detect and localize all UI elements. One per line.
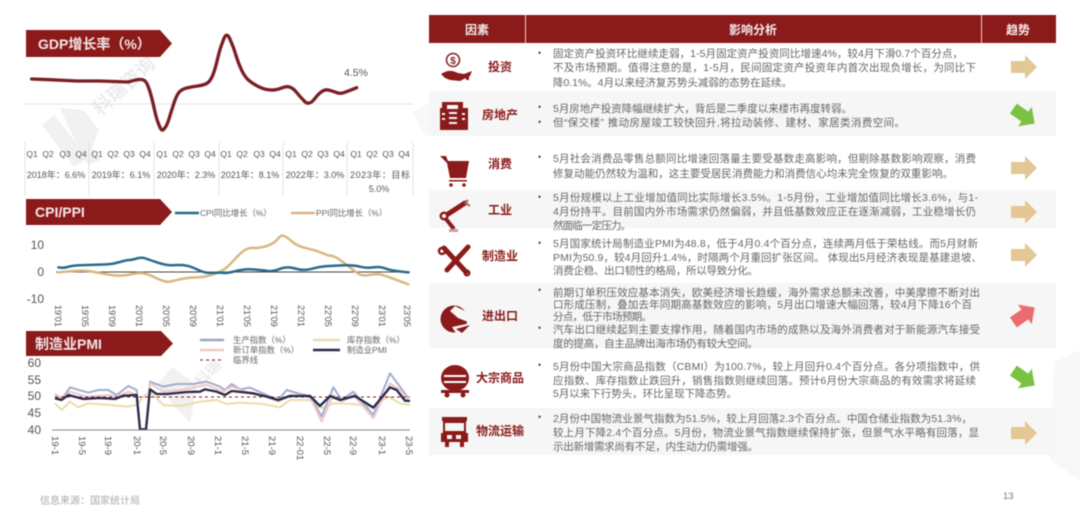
arrow: flat <box>1011 55 1037 79</box>
icon: robot arm <box>440 200 470 232</box>
PMI line chart: 23-1 <box>376 436 387 455</box>
PMI line chart: 21-1 <box>212 436 223 455</box>
row: logistics: 物流运输 <box>476 423 524 438</box>
source note: 信息来源：国家统计局 <box>40 494 140 507</box>
GDP quarter table: Q2 <box>366 149 378 159</box>
row: commodities: 5月以来下行势头，环比呈现下降态势。 <box>553 387 737 400</box>
heading: CPI/PPI: CPI/PPI <box>35 204 85 220</box>
PMI legend: 制造业PMI <box>347 345 387 355</box>
row: manufacturing: 5月国家统计局制造业PMI为48.8，低于4月0.4个百分点，连续两月低于荣枯线。而5月财新 <box>553 237 978 250</box>
CPI/PPI line chart: 23'01 <box>377 305 387 327</box>
arrow: down <box>1006 361 1042 395</box>
table header <box>429 15 1056 43</box>
GDP quarter table: Q1 <box>350 149 362 159</box>
CPI/PPI line chart: 20'05 <box>161 305 171 327</box>
panel: CPI/PPI <box>26 199 412 327</box>
arrow: flat <box>1011 200 1037 224</box>
icon: money in hand <box>441 54 472 81</box>
PMI legend: 新订单指数（%） <box>233 345 299 355</box>
row: industry: 然面临一定压力。 <box>553 219 631 232</box>
row: real estate: • <box>538 117 541 127</box>
row: logistics <box>441 412 1037 453</box>
PMI line chart: 19-1 <box>49 436 60 455</box>
GDP quarter table: Q2 <box>172 149 184 159</box>
PMI line chart: 22-01 <box>294 436 305 460</box>
GDP quarter table: Q1 <box>220 149 232 159</box>
icon: cart <box>440 156 469 187</box>
CPI/PPI line chart: 22'05 <box>323 305 333 327</box>
CPI/PPI line chart: 19'05 <box>80 305 90 327</box>
GDP quarter table: Q4 <box>204 149 216 159</box>
row: commodities: 大宗商品 <box>476 370 524 385</box>
row: logistics: 2月份中国物流业景气指数为51.5%，较上月回落2.3个百分点。中国仓储业指数为51.3%， <box>553 412 972 425</box>
GDP quarter table: Q4 <box>333 149 345 159</box>
row: consumption: 修复动能仍然较为温和，这主要受居民消费能力和消费信心均未完全恢复的双重影响。 <box>553 167 953 180</box>
GDP quarter table: Q3 <box>382 149 394 159</box>
GDP quarter table: Q1 <box>91 149 103 159</box>
row: manufacturing: 消费企稳、出口韧性的格局，所以导致分化。 <box>553 264 758 277</box>
CPI/PPI line chart: 22'01 <box>296 305 306 327</box>
table header: 因素 <box>465 22 489 37</box>
GDP quarter table: Q3 <box>317 149 329 159</box>
row: commodities <box>441 360 1042 400</box>
GDP line chart <box>24 35 413 130</box>
CPI/PPI legend: CPI同比增长（%） <box>200 208 272 218</box>
PMI line chart: 21-5 <box>239 436 250 455</box>
icon: tank car <box>441 365 469 398</box>
row: manufacturing: PMI为50.9，较4月回升1.4%，时隔两个月重回扩张区间。 体现出5月经济表现是基建退坡、 <box>553 251 982 264</box>
row: import and export: 汽车出口继续起到主要支撑作用，随着国内市场的成熟以及海外消费者对于新能源汽车接受 <box>553 323 980 336</box>
row: manufacturing: • <box>538 238 541 248</box>
row: consumption: • <box>538 152 541 162</box>
PMI legend: 库存指数（%） <box>347 335 405 345</box>
GDP quarter table: Q3 <box>188 149 200 159</box>
PMI line chart: 19-5 <box>76 436 87 455</box>
row: import and export: 口形成压制，叠加去年同期高基数效应的影响，5月出口增速大幅回落，较4月下降16个百 <box>553 298 972 311</box>
panel: factor table <box>429 15 1056 455</box>
PMI line chart: 60 <box>28 356 41 370</box>
heading: PMI <box>26 331 173 356</box>
row: investment: 投资 <box>488 60 512 74</box>
GDP quarter table: 2021年：8.1% <box>221 169 279 180</box>
row: investment: • <box>538 48 541 58</box>
heading: CPI/PPI <box>26 199 172 225</box>
arrow: flat <box>1011 156 1037 180</box>
arrow: up <box>1006 298 1042 332</box>
CPI/PPI line chart <box>27 235 412 327</box>
row: real estate: 但“保交楼” 推动房屋竣工较快回升,将拉动装修、建材、家居类消费空间。 <box>553 116 905 129</box>
CPI/PPI line chart: 19'01 <box>53 305 63 327</box>
CPI/PPI line chart: 22'09 <box>350 305 360 327</box>
CPI/PPI line chart: 21'09 <box>269 305 279 327</box>
GDP quarter table: Q1 <box>285 149 297 159</box>
PMI line chart: 21-9 <box>266 436 277 455</box>
GDP quarter table: Q2 <box>301 149 313 159</box>
GDP quarter table: Q3 <box>253 149 265 159</box>
PMI line chart: 20-9 <box>185 436 196 455</box>
heading: GDP <box>26 30 172 57</box>
row: import and export <box>440 285 1042 350</box>
icon: money in hand: $ <box>450 56 456 67</box>
row: logistics: 示出新增需求尚有不足，内生动力仍需增强。 <box>553 440 758 453</box>
row: import and export: 前期订单积压效应基本消失，欧美经济增长趋缓，海外需求总额未改善，中美摩擦不断对出 <box>553 286 980 299</box>
row: consumption <box>440 152 1037 187</box>
GDP quarter table: 2019年：6.1% <box>92 169 150 180</box>
CPI/PPI legend <box>175 208 387 218</box>
GDP quarter table: Q4 <box>75 149 87 159</box>
row: investment: 不及市场预期。值得注意的是，1-5月，民间固定资产投资年内首次出现负增长，为同比下 <box>553 61 976 74</box>
row: industry: 工业 <box>488 203 512 217</box>
PMI legend <box>200 335 405 365</box>
row: logistics: • <box>538 412 541 422</box>
row: industry: • <box>538 192 541 202</box>
CPI/PPI line chart: 21'05 <box>242 305 252 327</box>
GDP quarter table: 5.0% <box>369 184 389 194</box>
icon: truck <box>441 417 468 447</box>
row: industry: 5月份规模以上工业增加值同比实际增长3.5%。1-5月份，工业增加值同比增长3.6%，与1- <box>553 191 978 204</box>
row: import and export: 度的提高，自主品牌出海市场仍有较大空间。 <box>553 337 758 350</box>
GDP quarter table: Q4 <box>139 149 151 159</box>
GDP quarter table: Q1 <box>156 149 168 159</box>
row backgrounds <box>429 91 1056 455</box>
PMI legend: 生产指数（%） <box>233 335 291 345</box>
row: industry: 4月份持平。目前国内外市场需求仍然偏弱，并且低基数效应正在逐渐减弱，工业稳增长仍 <box>553 205 976 218</box>
row: consumption: 5月社会消费品零售总额同比增速回落量主要受基数走高影响，但剔除基数影响观察，消费 <box>553 152 976 165</box>
GDP quarter table: Q1 <box>26 149 38 159</box>
row: industry <box>440 191 1037 232</box>
arrow: flat <box>1011 243 1037 267</box>
row: consumption: 消费 <box>488 156 512 171</box>
row: manufacturing <box>439 237 1037 277</box>
CPI/PPI line chart: 20'09 <box>188 305 198 327</box>
row: import and export: • <box>538 285 541 295</box>
panel: manufacturing PMI <box>26 331 414 460</box>
watermarks <box>42 53 1080 480</box>
GDP quarter table: Q4 <box>269 149 281 159</box>
row: real estate: 房地产 <box>482 107 518 122</box>
page number: 13 <box>1003 491 1014 502</box>
CPI/PPI line chart: 10 <box>31 238 44 252</box>
CPI/PPI line chart: -10 <box>27 292 44 306</box>
PMI line chart: 55 <box>28 373 41 387</box>
GDP quarter table: 2018年：6.6% <box>27 169 85 180</box>
heading: GDP: GDP增长率（%） <box>38 36 151 52</box>
PMI line chart: 40 <box>28 423 41 437</box>
GDP quarter table: Q2 <box>107 149 119 159</box>
GDP quarter table: Q2 <box>42 149 54 159</box>
GDP quarter table: 2020年：2.3% <box>157 169 215 180</box>
CPI/PPI line chart: 21'01 <box>215 305 225 327</box>
row: commodities: 应指数、库存指数止跌回升，销售指数则继续回落。预计6月份大宗商品的有效需求将延续 <box>553 374 976 387</box>
PMI line chart: 19-9 <box>102 436 113 455</box>
GDP quarter table: 2023年：目标 <box>350 169 410 180</box>
CPI/PPI line chart: 20'01 <box>134 305 144 327</box>
GDP quarter table: Q3 <box>59 149 71 159</box>
CPI/PPI legend: PPI同比增长（%） <box>316 208 387 218</box>
PMI line chart: 22-9 <box>347 436 358 455</box>
PMI line chart: 20-5 <box>157 436 168 455</box>
CPI/PPI line chart: 23'05 <box>402 305 412 327</box>
row: import and export: 分点，低于市场预期。 <box>553 310 652 323</box>
row: investment <box>441 47 1037 89</box>
PMI line chart: 20-1 <box>131 436 142 455</box>
row: real estate: • <box>538 102 541 112</box>
icon: tools <box>439 247 470 276</box>
row: import and export: • <box>538 323 541 333</box>
watermarks: 科瑞咨询 <box>89 53 160 120</box>
row: investment: 固定资产投资环比继续走弱，1-5月固定资产投资同比增速4%，较4月下滑0.7个百分点， <box>553 47 963 60</box>
GDP quarter table: 2022年：3.0% <box>286 169 344 180</box>
icon: buildings <box>440 102 468 130</box>
icon: globe with plane <box>440 306 471 333</box>
GDP quarter table <box>25 142 413 196</box>
GDP quarter table: Q4 <box>398 149 410 159</box>
PMI line chart: 45 <box>28 406 41 420</box>
arrow: flat <box>1011 421 1037 445</box>
GDP quarter table: Q3 <box>123 149 135 159</box>
row: manufacturing: 制造业 <box>482 248 518 263</box>
arrow: down <box>1006 99 1042 133</box>
PMI legend: 临界线 <box>233 355 259 365</box>
panel: GDP growth <box>24 30 413 196</box>
row: logistics: 较上月下降2.4个百分点。5月份，物流业景气指数继续保持扩张，但景气水平略有回落，显 <box>553 426 980 439</box>
row: commodities: • <box>538 360 541 370</box>
GDP quarter table: Q2 <box>236 149 248 159</box>
row: investment: 降0.1%。4月以来经济复苏势头减弱的态势在延续。 <box>553 76 792 89</box>
CPI/PPI line chart: 0 <box>37 265 44 279</box>
row: import and export: 进出口 <box>482 308 518 323</box>
table header: 趋势 <box>1006 22 1030 37</box>
PMI line chart <box>28 356 414 460</box>
watermarks: 科瑞 <box>192 356 225 391</box>
table header: 影响分析 <box>729 22 777 37</box>
PMI line chart: 50 <box>28 389 41 403</box>
row: real estate <box>440 99 1042 133</box>
CPI/PPI line chart: 19'09 <box>107 305 117 327</box>
row: real estate: 5月房地产投资降幅继续扩大，背后是二季度以来楼市再度转弱。 <box>553 102 852 115</box>
row: commodities: 5月份中国大宗商品指数（CBMI）为100.7%，较上月回升0.4个百分点。各分项指数中，供 <box>553 360 980 373</box>
PMI line chart: 22-5 <box>321 436 332 455</box>
heading: PMI: 制造业PMI <box>35 336 102 352</box>
GDP line chart: 4.5% <box>344 67 368 79</box>
PMI line chart: 23-5 <box>403 436 414 455</box>
